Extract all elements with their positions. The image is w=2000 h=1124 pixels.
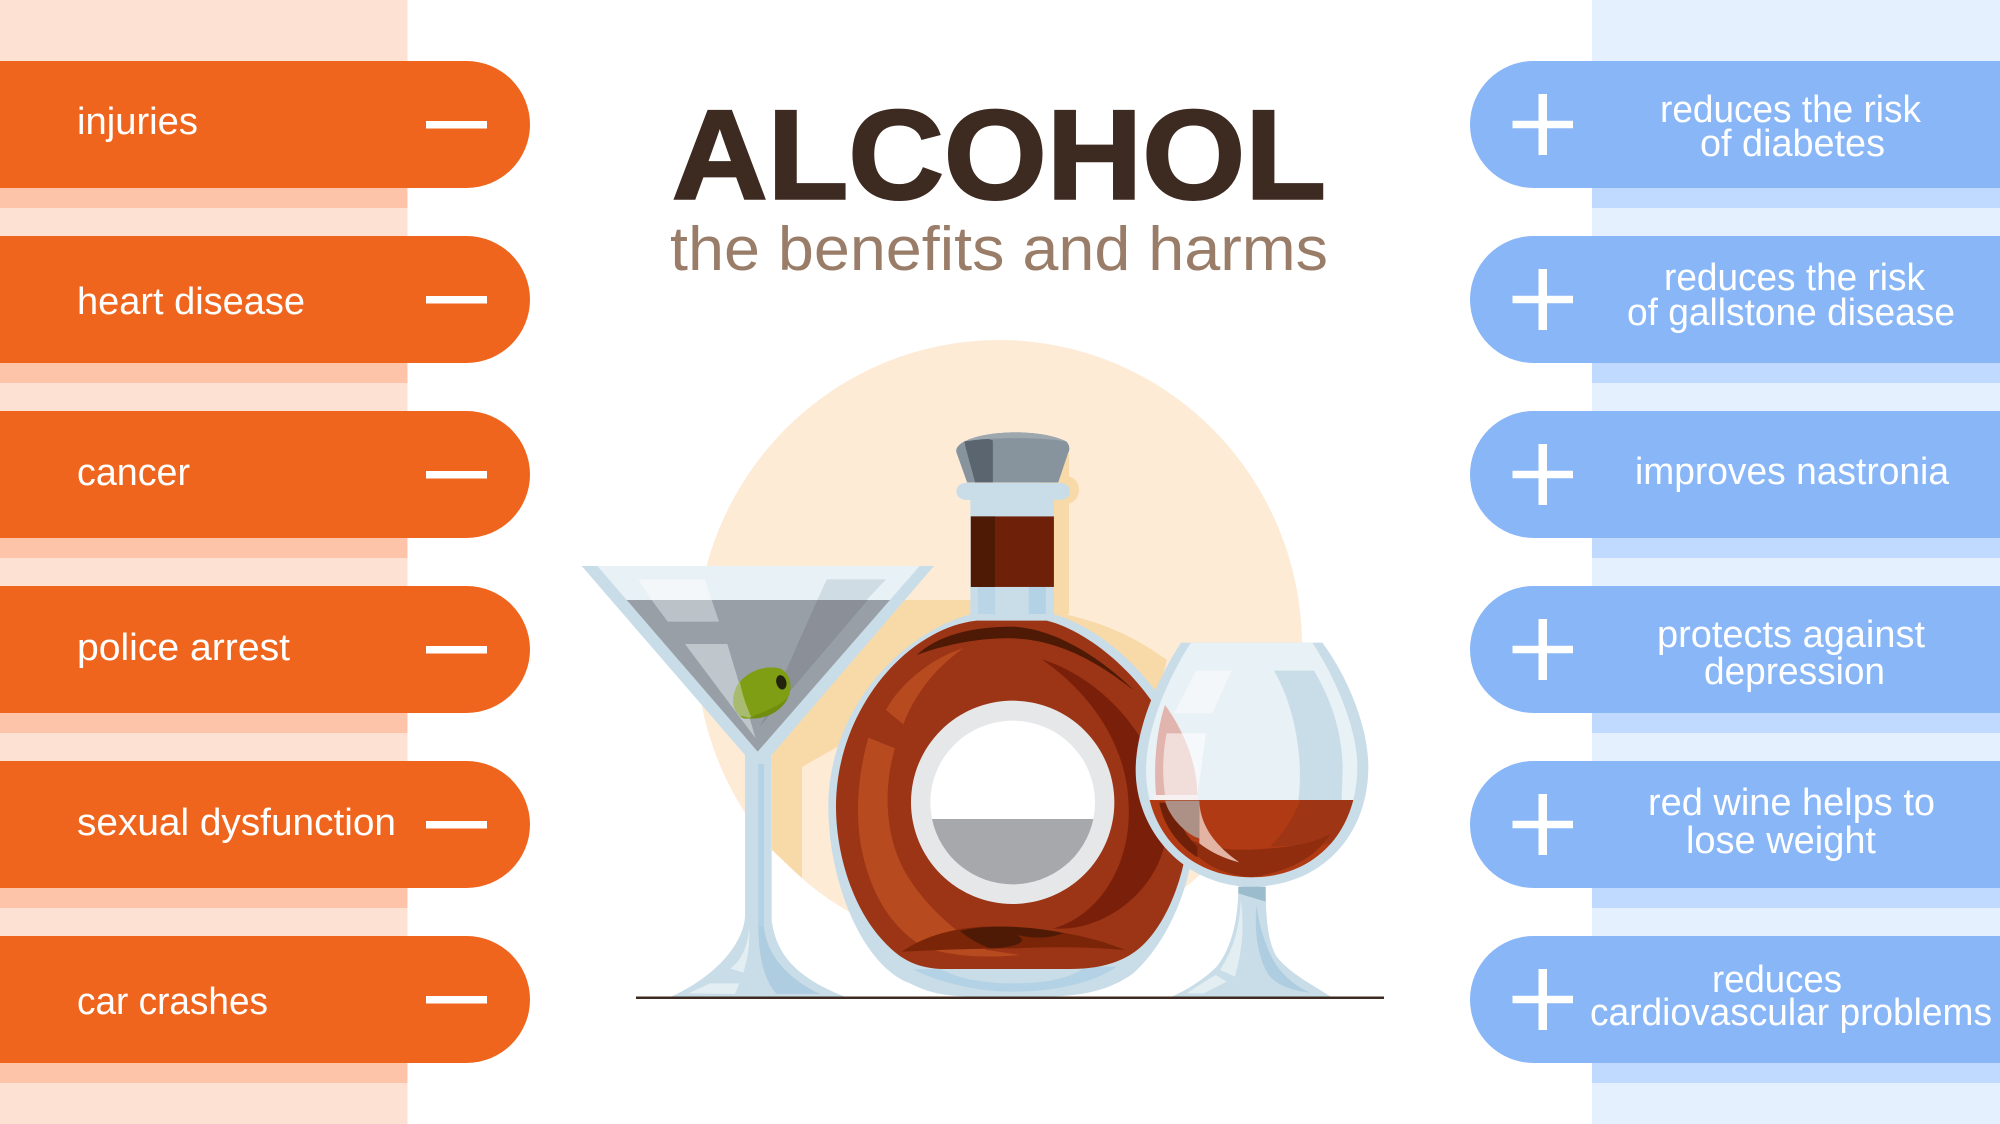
benefit: improves nastronia: improves nastronia [1635, 451, 1950, 493]
background circle [696, 340, 1302, 952]
harm: car crashes [0, 936, 530, 1063]
benefit: red wine helps to lose weight [1470, 761, 2000, 888]
benefit: reduces the risk of gallstone disease [1470, 236, 2000, 363]
benefit: reduces the risk of diabetes: of diabetes [1700, 123, 1885, 165]
icon: bottle body [828, 614, 1197, 997]
subtitle: the benefits and harms [670, 215, 1328, 284]
bottle and glass shadow [772, 454, 1167, 878]
title: ALCOHOL [672, 84, 1326, 226]
liquid [836, 621, 1189, 969]
benefit: protects against depression: protects against [1657, 614, 1925, 656]
benefit: protects against depression: depression [1704, 651, 1885, 693]
harm: car crashes: car crashes [77, 981, 268, 1023]
harm: injuries [0, 61, 530, 188]
benefit: protects against depression [1470, 586, 2000, 713]
benefit: red wine helps to lose weight: red wine helps to [1648, 782, 1935, 824]
harm: sexual dysfunction [0, 761, 530, 888]
panel: harms background band [0, 0, 408, 1124]
label [911, 701, 1114, 904]
benefit: reduces cardiovascular problems: cardiovascular problems [1590, 992, 1992, 1034]
icon: snifter glass [1136, 643, 1373, 997]
benefit: reduces the risk of gallstone disease: of gallstone disease [1627, 292, 1955, 334]
panel: benefits background band [1592, 0, 2000, 1124]
harm: cancer: cancer [77, 452, 190, 494]
benefit: reduces the risk of gallstone disease: reduces the risk [1664, 257, 1926, 299]
harm: sexual dysfunction: sexual dysfunction [77, 802, 396, 844]
harm: heart disease: heart disease [77, 281, 305, 323]
benefit: improves nastronia [1470, 411, 2000, 538]
harm: cancer [0, 411, 530, 538]
benefit: reduces cardiovascular problems: reduces [1712, 959, 1842, 1001]
harm: injuries: injuries [77, 101, 198, 143]
cap [956, 432, 1069, 482]
illustration: drinks [582, 340, 1373, 998]
icon: bottle neck and cap [956, 432, 1070, 626]
benefit: reduces the risk of diabetes [1470, 61, 2000, 188]
harm: police arrest: police arrest [77, 627, 290, 669]
olive [733, 667, 791, 719]
benefit: reduces cardiovascular problems [1470, 936, 2000, 1063]
benefit: reduces the risk of diabetes: reduces the risk [1660, 89, 1922, 131]
harm: police arrest [0, 586, 530, 713]
ground line [636, 996, 1384, 999]
icon: martini glass [582, 566, 934, 998]
harm: heart disease [0, 236, 530, 363]
benefit: red wine helps to lose weight: lose weight [1686, 820, 1876, 862]
